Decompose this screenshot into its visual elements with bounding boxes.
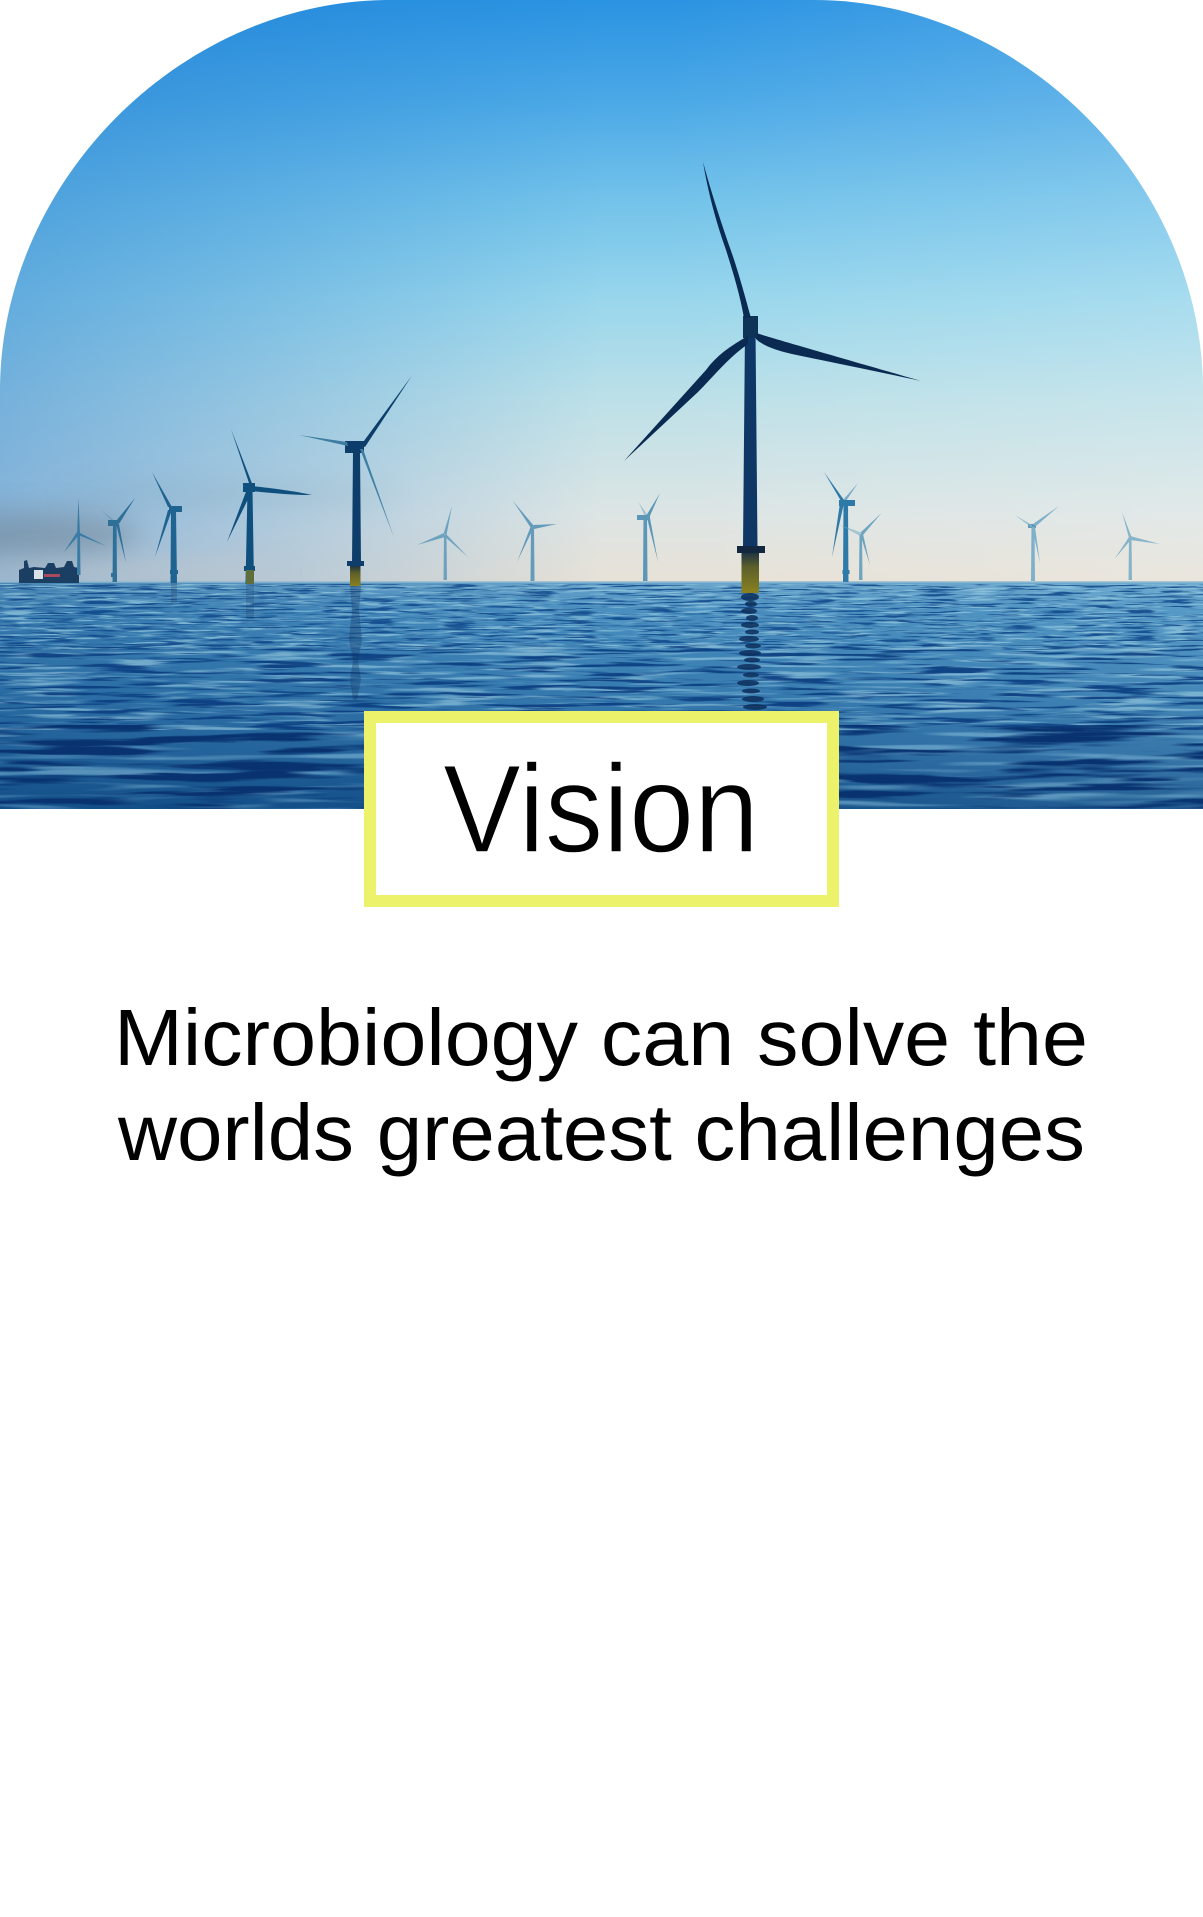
- blade right: [756, 333, 921, 381]
- infographic canvas: [0, 0, 1203, 1176]
- turbine 12: [1015, 506, 1059, 581]
- nacelle: [743, 316, 758, 338]
- blade up: [703, 162, 751, 318]
- turbine 2: [299, 376, 412, 586]
- turbine 3: [227, 429, 312, 584]
- turbine 6: [64, 498, 106, 575]
- turbine 9: [637, 493, 660, 581]
- turbine 11: [840, 513, 882, 580]
- yellow frame: [370, 717, 833, 901]
- statement text: [114, 993, 1088, 1177]
- large foreground turbine: [624, 162, 921, 593]
- turbine 13: [1115, 512, 1160, 580]
- turbine 5: [101, 498, 135, 582]
- platform: [737, 546, 765, 553]
- statement text: Microbiology can solve the: [114, 993, 1088, 1082]
- turbine 4: [152, 472, 182, 583]
- distant turbines, left group: [64, 376, 660, 586]
- hero photo: offshore wind farm in arch shape: [0, 0, 1203, 809]
- sea with ripples: [0, 581, 1203, 809]
- ship on the horizon: [19, 560, 79, 583]
- yellow transition piece: [742, 553, 759, 593]
- blade left: [624, 336, 748, 461]
- tower: [743, 330, 758, 547]
- sky: [0, 0, 1203, 585]
- distant turbines, right group: [824, 472, 1160, 582]
- reflections of towers in the water: [171, 583, 767, 710]
- turbine 8: [513, 501, 557, 581]
- heading text: Vision: [443, 740, 759, 879]
- statement text: worlds greatest challenges: [117, 1088, 1085, 1177]
- heading: Vision in yellow frame: [370, 717, 833, 901]
- turbine 7: [417, 506, 468, 580]
- turbine 10: [824, 472, 858, 582]
